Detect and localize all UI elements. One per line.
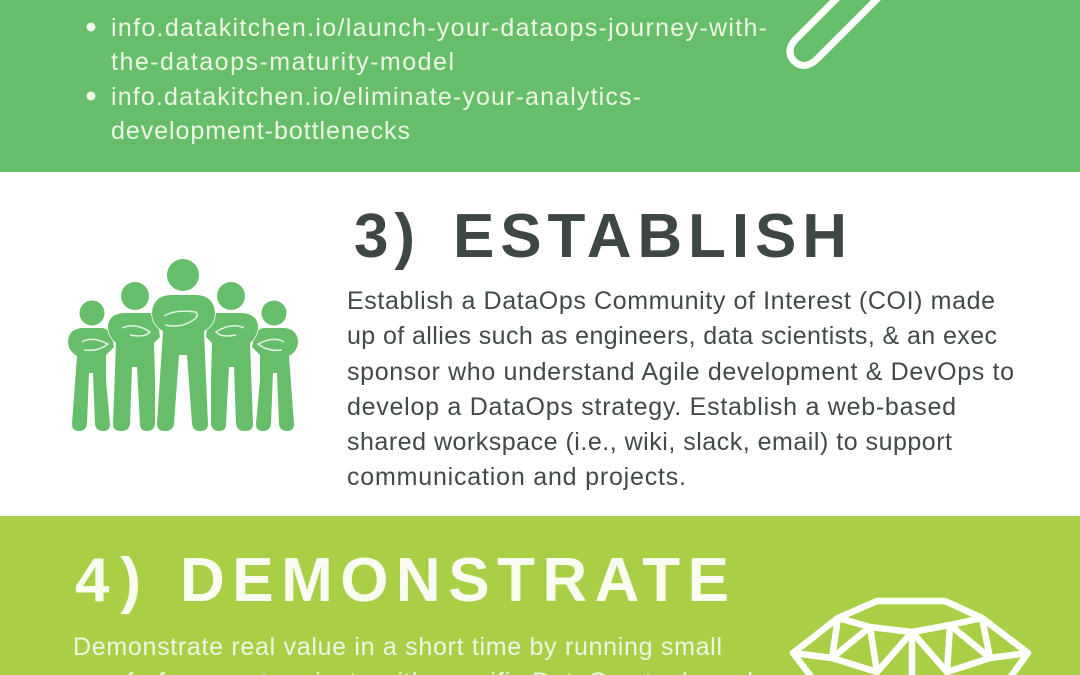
person inner right (206, 282, 258, 431)
body text: Demonstrate real value in a short time by running small (73, 633, 722, 661)
icon: diamond (793, 601, 1028, 675)
body text: shared workspace (i.e., wiki, slack, email) to support (347, 428, 952, 456)
panel: step 4 demonstrate (0, 516, 1080, 675)
person far left (68, 300, 114, 431)
icon: group of people with crossed arms (68, 259, 298, 431)
heading: 3) ESTABLISH: ESTABLISH (453, 202, 847, 271)
body text: communication and projects. (347, 463, 686, 491)
body text: develop a DataOps strategy. Establish a web-based (347, 393, 956, 421)
person centre (152, 259, 215, 431)
link list: info.datakitchen.io/eliminate-your-analytics- (111, 83, 641, 111)
heading: 4) DEMONSTRATE: 4) (75, 546, 141, 615)
link list (86, 14, 767, 145)
arm lines (82, 311, 284, 350)
person inner left (108, 282, 160, 431)
heading: 3) ESTABLISH: 3) (354, 202, 415, 271)
person far right (252, 300, 298, 431)
body text (347, 287, 1014, 491)
body text (73, 633, 753, 675)
link list: the-dataops-maturity-model (111, 48, 454, 76)
body text: Establish a DataOps Community of Interest (COI) made (347, 287, 995, 315)
body text: sponsor who understand Agile development & DevOps to (347, 358, 1014, 386)
icon: tool handle (790, 0, 880, 66)
link list: info.datakitchen.io/launch-your-dataops-journey-with- (111, 14, 767, 42)
panel: step 3 establish (0, 172, 1080, 516)
panel: section 2 green links (0, 0, 1080, 172)
body text: up of allies such as engineers, data scientists, & an exec (347, 322, 997, 350)
link list: development-bottlenecks (111, 117, 410, 145)
heading: 4) DEMONSTRATE: DEMONSTRATE (180, 546, 729, 615)
